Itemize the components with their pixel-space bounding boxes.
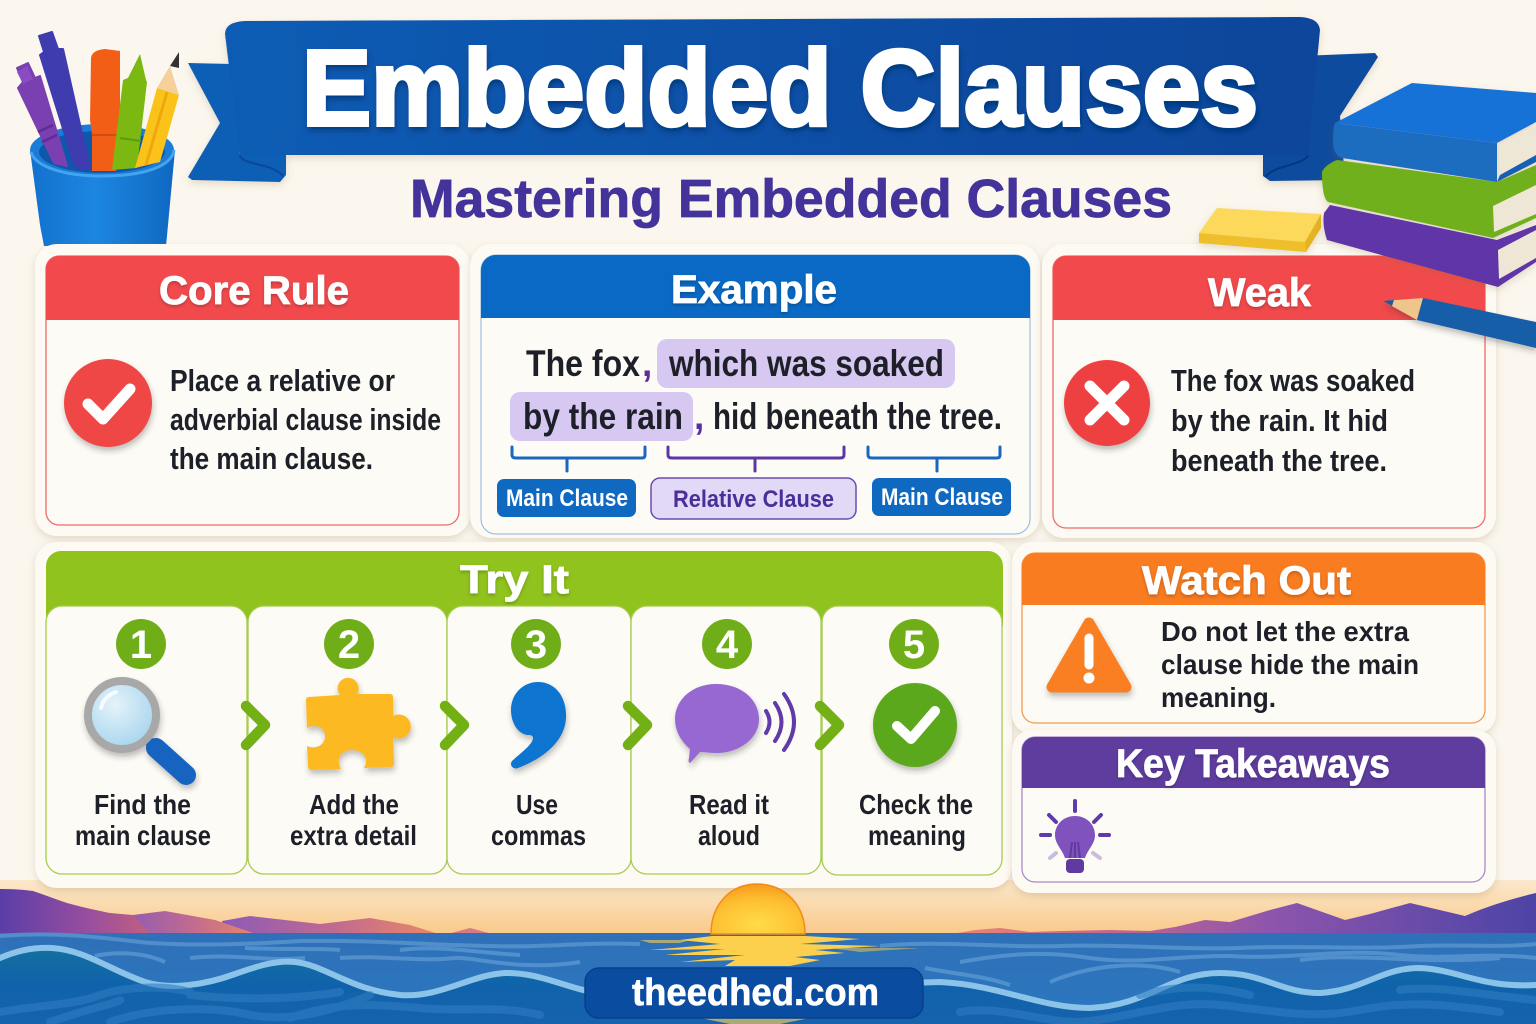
weak text: beneath the tree. — [1171, 443, 1387, 478]
watch out text: clause hide the main — [1161, 649, 1419, 680]
core rule text: adverbial clause inside — [170, 402, 441, 437]
chip: main clause: Main Clause — [506, 485, 628, 512]
purple pen — [17, 63, 67, 166]
chip: relative clause — [651, 478, 856, 519]
green crayon — [112, 54, 147, 170]
try it header — [46, 551, 1003, 626]
sun reflection — [640, 936, 920, 966]
step 2: extra detail — [290, 820, 417, 851]
panel: weak — [1042, 244, 1496, 538]
far wave lines — [0, 934, 1536, 985]
icon: cross mark — [1064, 360, 1150, 446]
weak text: by the rain. It hid — [1171, 403, 1388, 438]
step 5: Check the — [859, 789, 973, 820]
title: Embedded Clauses — [302, 27, 1258, 148]
step 5: meaning — [868, 820, 966, 851]
icon: comma — [511, 682, 566, 768]
example sentence: by the rain — [523, 396, 683, 437]
ribbon right tail — [1263, 53, 1378, 181]
orange marker — [90, 49, 120, 171]
example sentence: hid beneath the tree. — [713, 396, 1002, 437]
core rule text — [170, 363, 441, 476]
example sentence: The fox — [526, 343, 640, 384]
example sentence: , — [694, 396, 704, 437]
step 3: Use — [516, 789, 558, 820]
cup body — [30, 150, 175, 246]
front wave — [0, 948, 1536, 1024]
yellow pencil — [135, 52, 179, 168]
try it header: Try It — [460, 558, 569, 602]
core rule text: the main clause. — [170, 441, 373, 476]
ribbon left tail — [188, 63, 286, 182]
pencil cup — [17, 32, 179, 246]
watch out text: meaning. — [1161, 682, 1276, 713]
core rule header — [46, 256, 459, 320]
example header — [481, 255, 1030, 318]
purple book — [1323, 205, 1536, 287]
deep wave texture — [0, 988, 1536, 1022]
example sentence — [510, 339, 1002, 441]
sunset sea scene — [0, 880, 1536, 1024]
key takeaways header: Key Takeaways — [1116, 742, 1390, 786]
step 4 — [631, 606, 821, 874]
panel: core rule — [35, 244, 470, 536]
title ribbon — [188, 17, 1378, 182]
core rule text: Place a relative or — [170, 363, 395, 398]
arrows between steps — [246, 706, 839, 745]
chip: relative clause: Relative Clause — [673, 486, 834, 513]
icon: magnifying glass — [88, 681, 186, 775]
watch out text — [1161, 616, 1419, 713]
water — [0, 933, 1536, 1024]
sun glow foot reflection — [700, 1018, 810, 1024]
weak text: The fox was soaked — [1171, 363, 1415, 398]
step 3 — [447, 606, 631, 874]
key takeaways header — [1022, 737, 1485, 788]
step 3: 3 — [525, 623, 547, 667]
watch out text: Do not let the extra — [1161, 616, 1409, 647]
subtitle: Mastering Embedded Clauses — [410, 169, 1172, 229]
ribbon folds — [240, 156, 1308, 176]
chip: main clause — [497, 479, 636, 517]
watch out header: Watch Out — [1142, 559, 1351, 603]
step 1: main clause — [75, 820, 211, 851]
step 5: 5 — [903, 623, 925, 667]
weak header — [1053, 256, 1485, 320]
panel: example — [470, 244, 1040, 538]
icon: puzzle piece — [306, 678, 411, 770]
icon: warning triangle — [1052, 623, 1126, 687]
step 1 — [46, 606, 247, 874]
sun — [711, 884, 805, 934]
footer logo pill: theedhed.com — [632, 972, 879, 1014]
watch out header — [1022, 553, 1485, 605]
left mountains — [0, 889, 500, 936]
clause brackets — [512, 447, 1000, 471]
sticky note — [1199, 208, 1321, 252]
step 2: Add the — [309, 789, 399, 820]
step 1: 1 — [130, 623, 152, 667]
step 2 — [248, 606, 447, 874]
icon: sound waves — [766, 694, 794, 750]
panel: key takeaways — [1012, 730, 1496, 893]
green book — [1322, 160, 1536, 238]
example sentence: which was soaked — [668, 343, 944, 384]
blue pencil — [1383, 298, 1536, 348]
chip: main clause: Main Clause — [881, 484, 1003, 511]
blue pen — [39, 32, 90, 169]
icon: speech bubble — [675, 684, 759, 763]
chip: main clause — [872, 478, 1011, 516]
step 4: aloud — [698, 820, 760, 851]
step 2: 2 — [338, 623, 360, 667]
example sentence: , — [642, 343, 652, 384]
right mountains — [940, 893, 1536, 940]
weak text — [1171, 363, 1415, 478]
core rule header: Core Rule — [159, 269, 349, 313]
icon: check mark — [64, 359, 152, 447]
panel: try it — [35, 542, 1012, 888]
step 4: 4 — [716, 623, 739, 667]
stacked books — [1322, 83, 1536, 287]
blue book — [1333, 83, 1536, 182]
step 3: commas — [491, 820, 586, 851]
icon: green check — [873, 683, 957, 767]
step 1: Find the — [94, 789, 191, 820]
step 5 — [822, 606, 1002, 875]
icon: light bulb — [1041, 801, 1109, 873]
step 4: Read it — [689, 789, 769, 820]
footer logo pill — [585, 968, 923, 1018]
weak header: Weak — [1208, 271, 1312, 315]
ribbon body — [225, 17, 1320, 155]
panel: watch out — [1012, 542, 1496, 734]
example header: Example — [671, 268, 837, 312]
